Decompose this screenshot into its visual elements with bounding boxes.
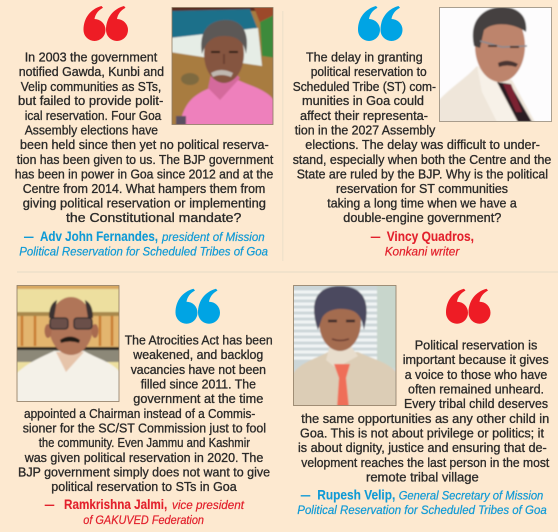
quote text: Every tribal child deserves xyxy=(404,396,548,411)
attribution: — xyxy=(371,228,380,244)
icon: red quotation mark xyxy=(446,289,490,324)
attribution: vice president xyxy=(172,498,245,512)
icon: blue quotation mark xyxy=(358,6,402,41)
quote text xyxy=(298,338,550,484)
attribution: — xyxy=(301,486,310,502)
quote text: affect their representa- xyxy=(300,108,428,123)
attribution xyxy=(297,486,547,517)
quote text: remote tribal village xyxy=(366,470,479,484)
quote text: political reservation to STs in Goa xyxy=(51,479,237,494)
panel: Adv John Fernandes quote xyxy=(15,5,276,258)
quote text: tion has been given to us. The BJP government xyxy=(17,152,274,167)
attribution: Vincy Quadros, xyxy=(387,228,474,244)
quote text: In 2003 the government xyxy=(25,50,158,64)
attribution: General Secretary of Mission xyxy=(399,488,543,502)
quote text: munities in Goa could xyxy=(302,93,424,108)
quote text: vacancies have not been xyxy=(131,362,266,377)
quote text: is about dignity, justice and ensuring that de- xyxy=(298,440,547,455)
quote text: but failed to provide polit- xyxy=(18,93,163,108)
attribution: Rupesh Velip, xyxy=(317,486,395,502)
quote text: Velip communities as STs, xyxy=(21,79,161,94)
attribution: Adv John Fernandes, xyxy=(40,228,158,244)
quote text: political reservation to xyxy=(311,64,427,79)
photo: John Fernandes portrait xyxy=(170,5,276,127)
quote text: often remained unheard. xyxy=(408,382,544,396)
icon: blue quotation mark xyxy=(176,289,220,324)
quote text: important because it gives xyxy=(403,352,549,367)
attribution xyxy=(19,228,268,258)
attribution: president of Mission xyxy=(161,230,265,244)
quote text: notified Gawda, Kunbi and xyxy=(19,64,164,79)
quote text: has been in power in Goa since 2012 and at the xyxy=(15,166,273,182)
attribution: of GAKUVED Federation xyxy=(83,513,204,527)
icon: red quotation mark xyxy=(84,6,128,41)
panel: Rupesh Velip quote xyxy=(291,283,550,517)
quote text: double-engine government? xyxy=(343,210,501,225)
quote text: weakened, and backlog xyxy=(132,347,263,362)
quote text: taking a long time when we have a xyxy=(327,196,517,210)
quote text: appointed a Chairman instead of a Commis- xyxy=(24,406,255,421)
quote text: elections. The delay was difficult to under- xyxy=(305,137,540,152)
attribution xyxy=(371,228,474,258)
quote text: reservation for ST communities xyxy=(336,181,508,196)
quote text: government at the time xyxy=(133,391,263,406)
attribution: — xyxy=(45,496,54,512)
quote text xyxy=(15,50,274,225)
attribution: Political Reservation for Scheduled Tribes of Goa xyxy=(19,244,268,258)
quote text: was given political reservation in 2020. The xyxy=(24,450,263,465)
quote text: The Atrocities Act has been xyxy=(125,332,273,348)
panel: Vincy Quadros quote xyxy=(293,5,554,258)
quote text: The delay in granting xyxy=(306,50,423,64)
quote text: been held since then yet no political reserva- xyxy=(20,137,269,152)
quote text: Centre from 2014. What hampers them from xyxy=(23,181,265,196)
quote text: ical reservation. Four Goa xyxy=(25,108,162,123)
photo: Vincy Quadros portrait xyxy=(437,5,554,124)
quote text: Political reservation is xyxy=(415,338,538,352)
attribution: — xyxy=(24,228,34,244)
quote text: the same opportunities as any other child in xyxy=(301,411,549,426)
quote text: the community. Even Jammu and Kashmir xyxy=(39,435,251,450)
quote text xyxy=(18,332,273,494)
quote text: giving political reservation or implementing xyxy=(23,196,266,210)
quote text: Assembly elections have xyxy=(25,122,158,138)
quote text: the Constitutional mandate? xyxy=(66,210,241,225)
quote text: Scheduled Tribe (ST) com- xyxy=(293,79,436,94)
attribution: Konkani writer xyxy=(385,244,460,258)
quote text: State are ruled by the BJP. Why is the political xyxy=(297,166,548,182)
attribution xyxy=(45,496,245,527)
quote text: a voice to those who have xyxy=(405,367,547,382)
quote text: filled since 2011. The xyxy=(141,376,256,392)
panel: Ramkrishna Jalmi quote xyxy=(15,283,273,527)
quote text: tion in the 2027 Assembly xyxy=(295,122,436,138)
photo: Rupesh Velip portrait xyxy=(291,283,398,408)
quote text: sioner for the SC/ST Commission just to fool xyxy=(23,420,266,436)
quote text: BJP government simply does not want to give xyxy=(18,464,270,480)
photo: Ramkrishna Jalmi portrait xyxy=(15,283,121,403)
quote text xyxy=(293,50,551,225)
quote text: Goa. This is not about privilege or politics; it xyxy=(300,426,544,440)
attribution: Ramkrishna Jalmi, xyxy=(64,496,167,512)
